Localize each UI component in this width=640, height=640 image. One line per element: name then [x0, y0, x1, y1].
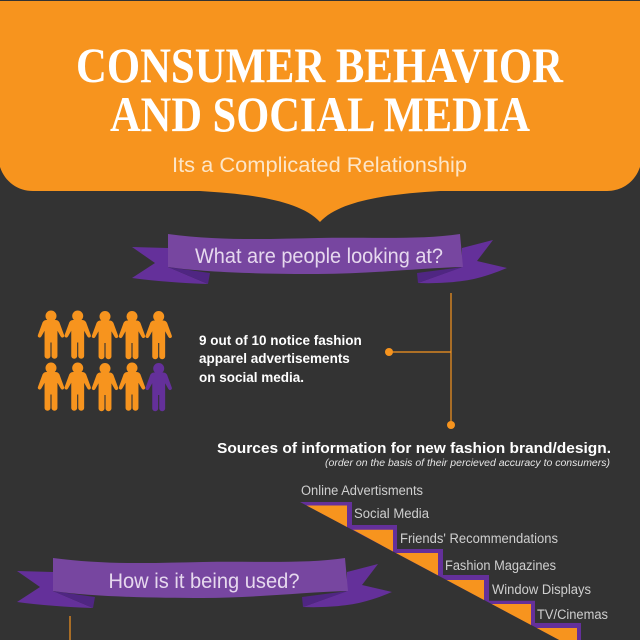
- statistic text: apparel advertisements: [199, 351, 350, 366]
- ribbon: What are people looking at?: What are people looking at?: [195, 244, 443, 268]
- connector: statistic to sources: [385, 293, 455, 429]
- ribbon: How is it being used?: How is it being used?: [108, 569, 300, 593]
- stair labels: Fashion Magazines: [445, 558, 556, 573]
- sources note: (order on the basis of their percieved accuracy to consumers): [325, 458, 610, 469]
- title: [76, 37, 564, 142]
- stair labels: Friends' Recommendations: [400, 531, 558, 546]
- icon array: 9 of 10 people: [38, 311, 171, 411]
- stair labels: [301, 483, 608, 622]
- ribbon: What are people looking at?: [132, 234, 507, 284]
- header panel: [0, 1, 640, 222]
- stair labels: Online Advertisments: [301, 483, 423, 498]
- stair labels: Social Media: [354, 506, 429, 521]
- title: AND SOCIAL MEDIA: [110, 86, 530, 142]
- stair labels: TV/Cinemas: [537, 607, 608, 622]
- staircase chart: [300, 483, 608, 640]
- ribbon: How is it being used?: [17, 558, 392, 608]
- stair labels: Window Displays: [492, 582, 591, 597]
- statistic text: 9 out of 10 notice fashion: [199, 333, 362, 348]
- subtitle: Its a Complicated Relationship: [172, 153, 467, 177]
- sources heading: Sources of information for new fashion brand/design.: [217, 440, 611, 457]
- connector line: [69, 616, 71, 640]
- title: CONSUMER BEHAVIOR: [76, 37, 564, 93]
- statistic text: on social media.: [199, 370, 304, 385]
